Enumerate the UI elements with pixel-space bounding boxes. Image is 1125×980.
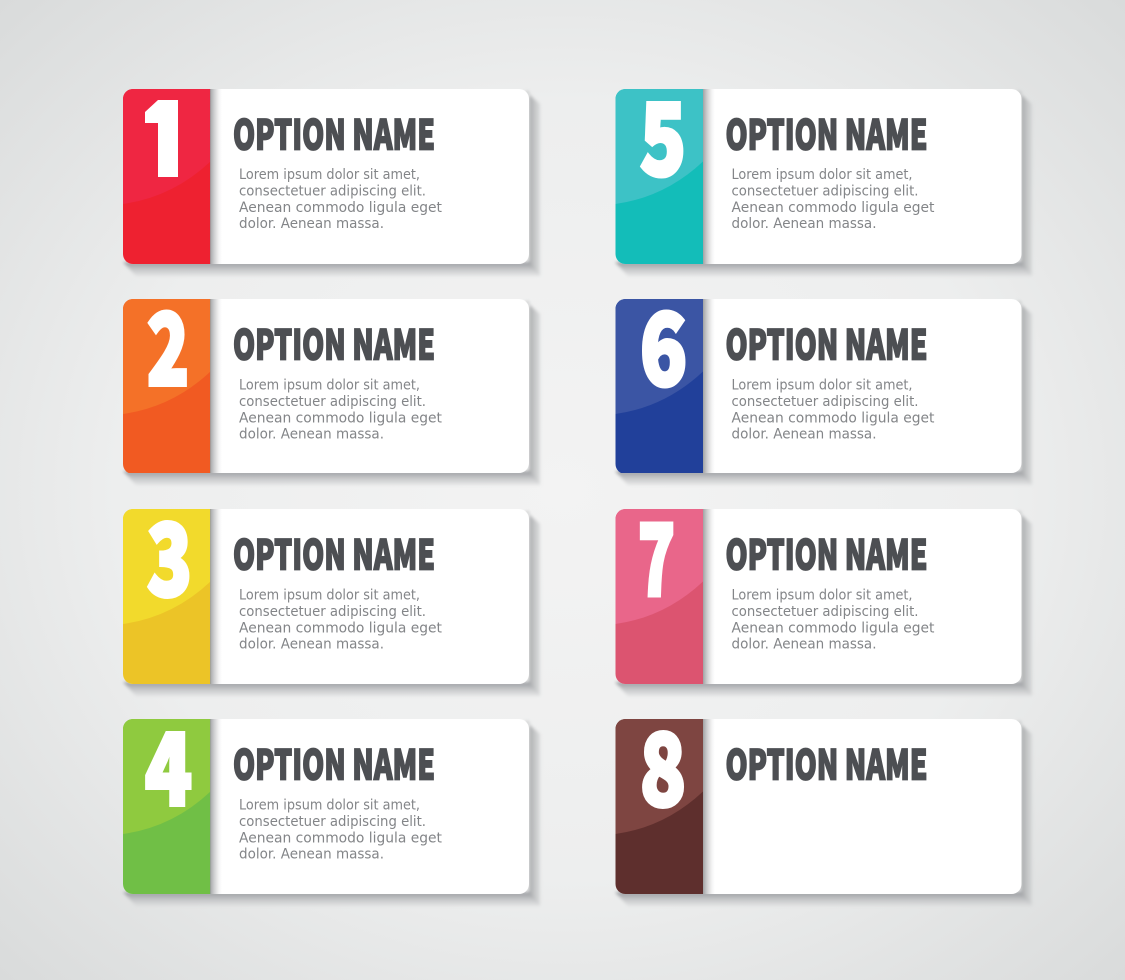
body text: consectetuer adipiscing elit.	[239, 394, 426, 410]
heading: OPTION NAME	[233, 311, 435, 371]
number 7: 7	[638, 480, 675, 624]
body text: dolor. Aenean massa.	[239, 846, 384, 862]
panel: option 7	[614, 509, 1032, 696]
heading: OPTION NAME	[233, 101, 435, 161]
number 1: 1	[151, 60, 184, 204]
body text: Lorem ipsum dolor sit amet,	[239, 588, 420, 604]
body text: consectetuer adipiscing elit.	[239, 604, 426, 620]
panel: option 4	[122, 719, 540, 906]
number 8: 8	[640, 690, 686, 834]
body text	[239, 167, 442, 232]
body text: dolor. Aenean massa.	[732, 636, 876, 652]
number 1	[145, 100, 178, 177]
body text: consectetuer adipiscing elit.	[732, 604, 918, 620]
panel: option 5	[614, 89, 1032, 276]
body text: dolor. Aenean massa.	[239, 636, 384, 652]
number 6: 6	[640, 270, 687, 414]
body text: Lorem ipsum dolor sit amet,	[732, 167, 912, 183]
body text: Aenean commodo ligula eget	[732, 620, 935, 636]
heading: OPTION NAME	[233, 521, 435, 581]
body text: Aenean commodo ligula eget	[732, 200, 935, 216]
body text: Lorem ipsum dolor sit amet,	[239, 798, 420, 814]
heading: OPTION NAME	[726, 311, 928, 371]
heading: OPTION NAME	[726, 731, 928, 791]
body text	[732, 167, 935, 232]
number 2: 2	[147, 270, 189, 414]
number 5: 5	[640, 60, 686, 204]
body text	[732, 378, 935, 442]
body text	[239, 798, 442, 862]
body text: Aenean commodo ligula eget	[239, 200, 442, 216]
heading: OPTION NAME	[726, 521, 928, 581]
body text: dolor. Aenean massa.	[239, 216, 384, 232]
panel: option 2	[122, 299, 541, 485]
body text: dolor. Aenean massa.	[239, 426, 384, 442]
body text: consectetuer adipiscing elit.	[732, 394, 918, 410]
heading: OPTION NAME	[233, 731, 435, 791]
panel: option 3	[122, 509, 541, 696]
number 4: 4	[145, 690, 192, 834]
body text: Lorem ipsum dolor sit amet,	[732, 588, 912, 604]
panel: option 8	[614, 719, 1032, 906]
body text: consectetuer adipiscing elit.	[239, 814, 426, 830]
body text: dolor. Aenean massa.	[732, 426, 876, 442]
panel: option 1	[122, 89, 540, 276]
body text	[239, 378, 442, 442]
body text: Lorem ipsum dolor sit amet,	[239, 378, 420, 394]
body text: Aenean commodo ligula eget	[239, 830, 442, 846]
body text: Aenean commodo ligula eget	[732, 410, 935, 426]
body text: consectetuer adipiscing elit.	[239, 184, 426, 200]
body text: dolor. Aenean massa.	[732, 216, 876, 232]
body text: Lorem ipsum dolor sit amet,	[239, 167, 420, 183]
panel: option 6	[614, 299, 1032, 485]
body text	[732, 588, 935, 652]
body text: Aenean commodo ligula eget	[239, 620, 442, 636]
heading: OPTION NAME	[726, 101, 928, 161]
body text: consectetuer adipiscing elit.	[732, 184, 918, 200]
body text: Lorem ipsum dolor sit amet,	[732, 378, 912, 394]
body text	[239, 588, 442, 652]
number 3: 3	[147, 480, 192, 624]
body text: Aenean commodo ligula eget	[239, 410, 442, 426]
